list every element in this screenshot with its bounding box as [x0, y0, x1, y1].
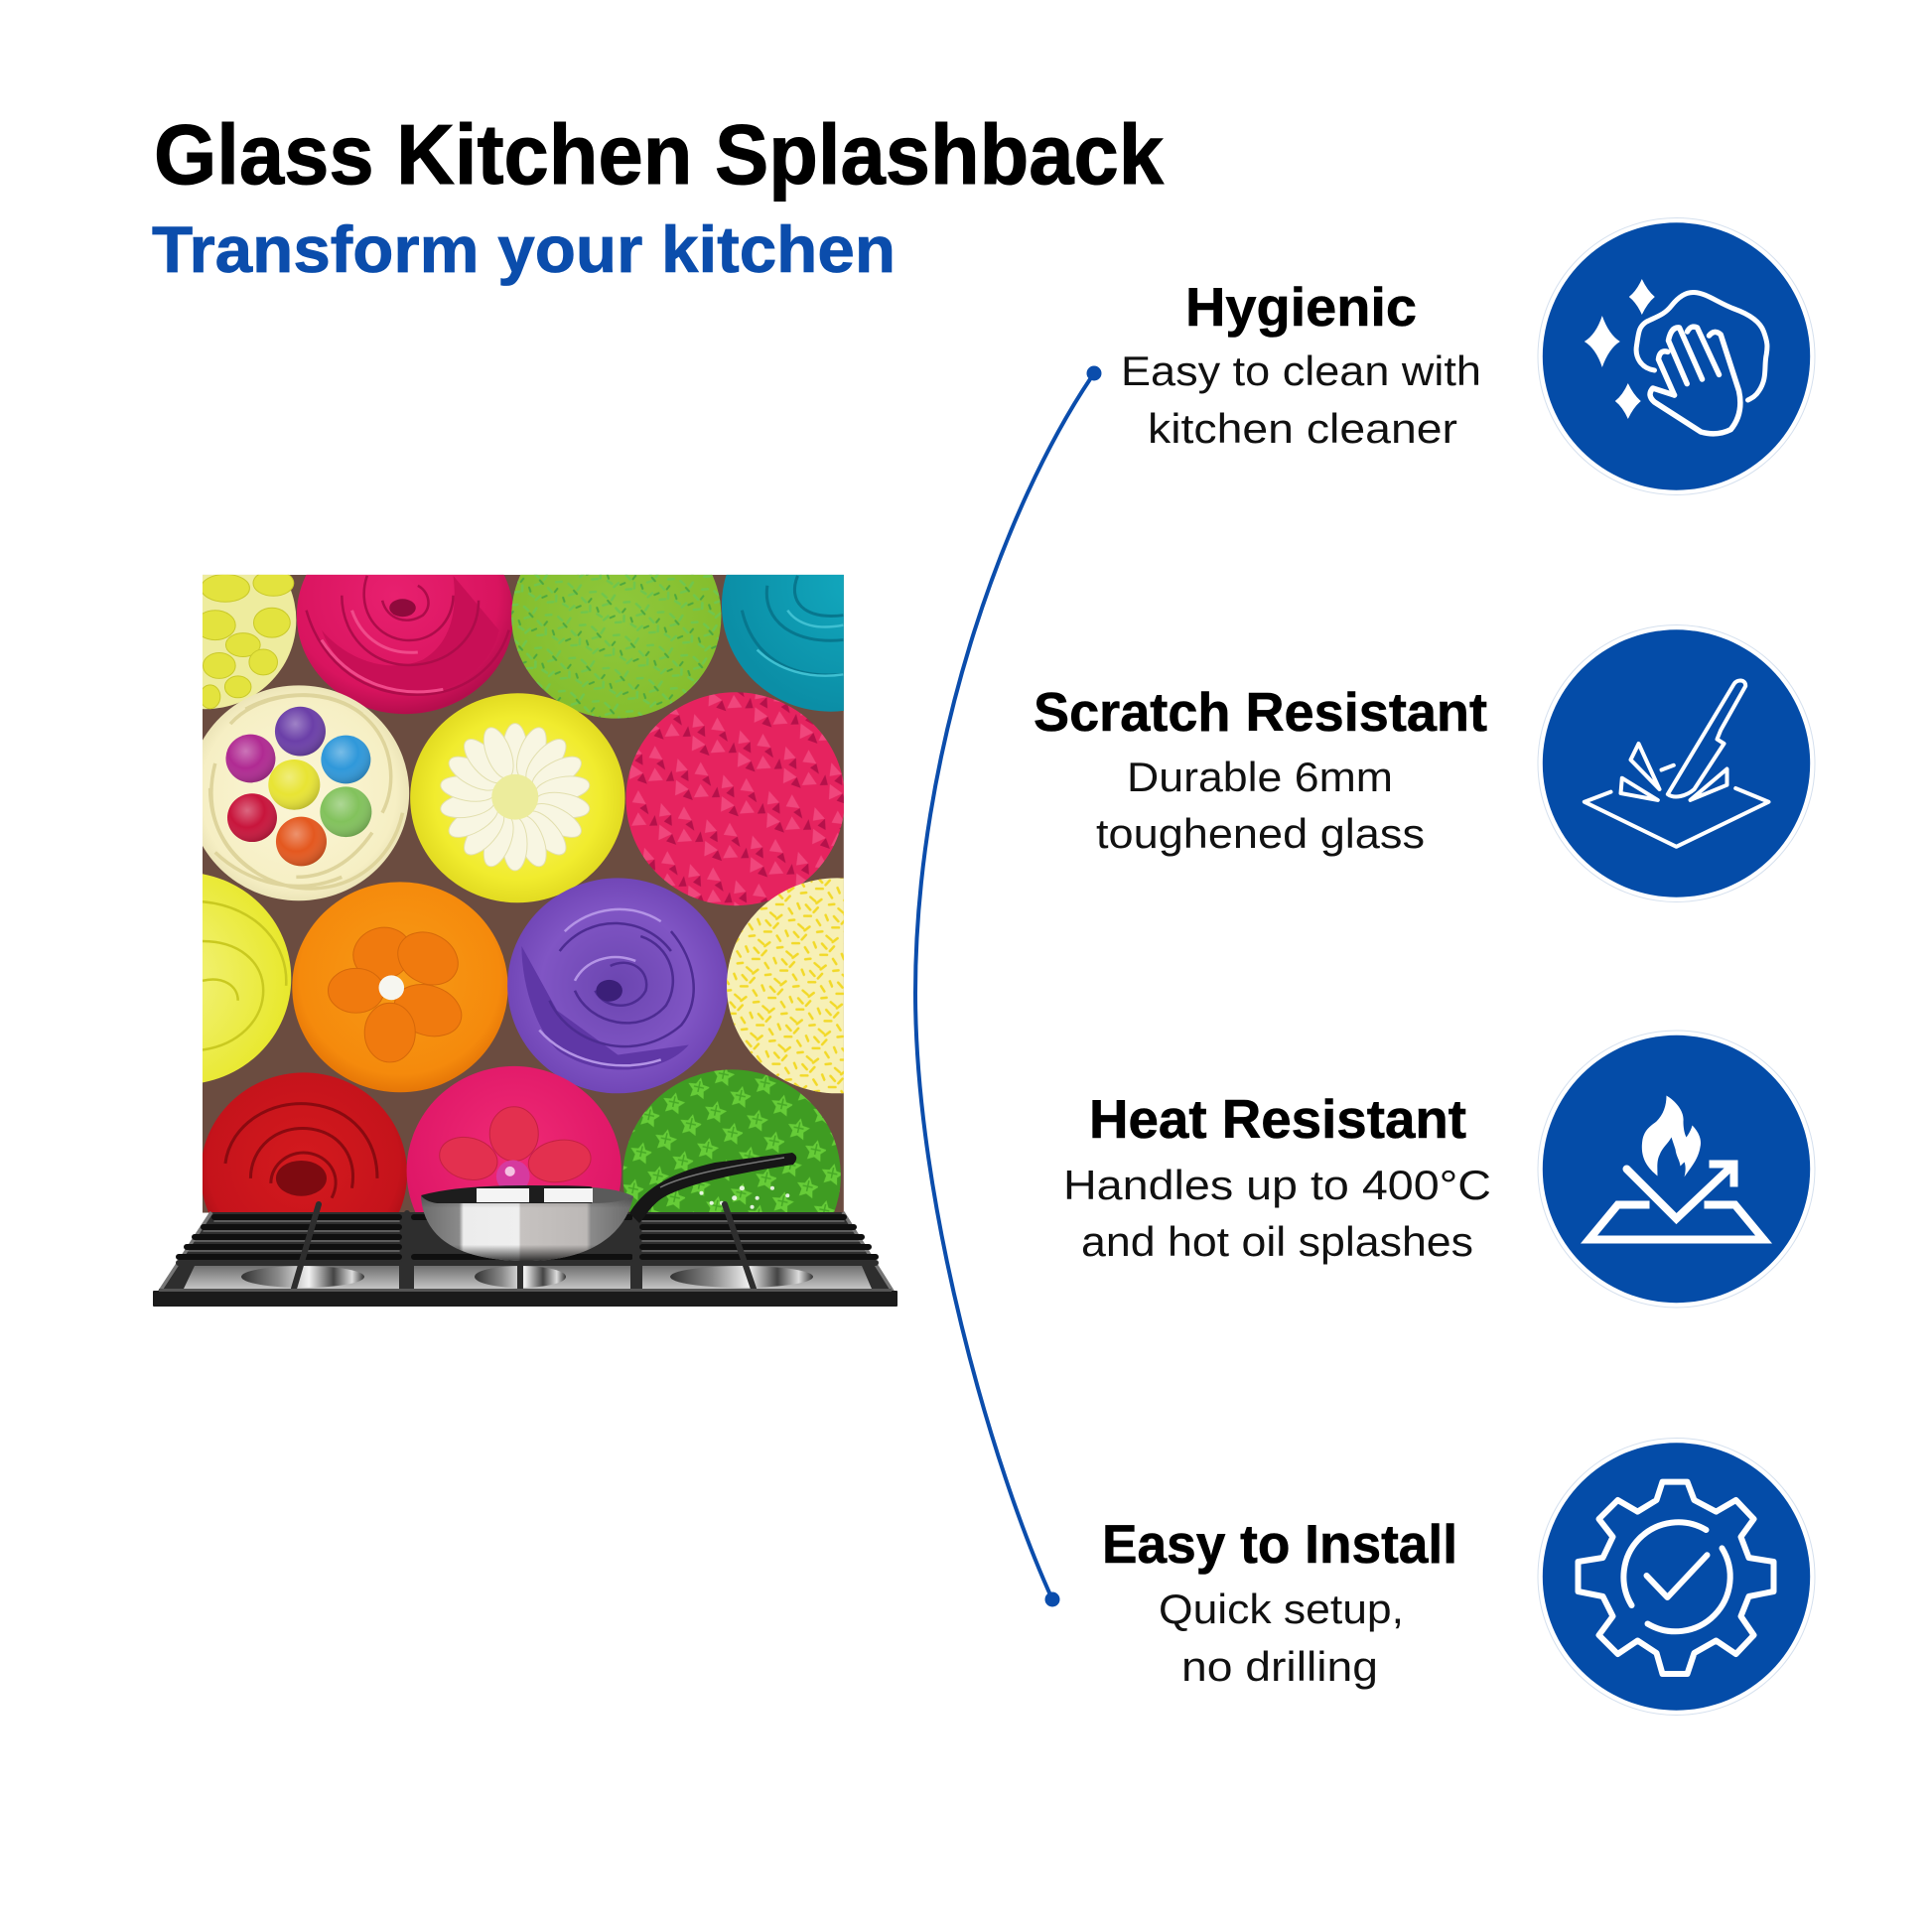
gas hob — [153, 1153, 897, 1307]
feature: hygienic — [1121, 276, 1481, 452]
cupcake: yellow with daisy — [410, 693, 624, 902]
connector dot bottom — [1044, 1592, 1060, 1606]
cupcake: hot pink with flower — [407, 1066, 621, 1212]
heading: Hygienic — [1185, 276, 1417, 338]
heading: Scratch Resistant — [1034, 681, 1487, 743]
cupcake: cream with candies — [189, 685, 409, 900]
description: Handles up to 400°C — [1063, 1162, 1491, 1208]
heading: Heat Resistant — [1089, 1088, 1466, 1150]
sugar flower — [329, 919, 469, 1062]
cupcake: green sprinkles — [511, 574, 721, 719]
cupcake: yellow buttons — [203, 574, 296, 709]
description: kitchen cleaner — [1148, 405, 1457, 452]
description — [1063, 1162, 1491, 1265]
cupcake: teal rose — [721, 574, 844, 712]
subtitle: Transform your kitchen — [152, 212, 896, 286]
burners — [241, 1266, 813, 1288]
cupcake: yellow swirl — [203, 874, 292, 1082]
cupcake: purple rose — [507, 878, 729, 1093]
icon: gear with check — [1538, 1438, 1815, 1716]
cupcake: yellow sprinkles — [727, 878, 844, 1094]
cupcake: orange with flower — [292, 882, 508, 1092]
pan body — [421, 1196, 633, 1261]
description: no drilling — [1181, 1643, 1378, 1690]
icon: hand wiping with sparkles — [1538, 218, 1815, 494]
title: Glass Kitchen Splashback — [154, 108, 1165, 203]
hob front edge — [153, 1291, 897, 1307]
splashback product photo: cupcakes — [203, 574, 844, 1213]
description: toughened glass — [1096, 810, 1425, 857]
feature: heat resistant — [1063, 1088, 1491, 1265]
description: and hot oil splashes — [1081, 1218, 1473, 1265]
hob top plate — [159, 1212, 894, 1293]
connector curve — [915, 365, 1102, 1606]
icon: knife on glass — [1538, 625, 1815, 901]
connector dot top — [1086, 365, 1102, 381]
frying pan — [421, 1153, 796, 1261]
pan handle — [629, 1153, 796, 1223]
description: Easy to clean with — [1121, 347, 1481, 394]
candies — [225, 707, 371, 866]
pan rim — [421, 1185, 592, 1203]
feature: easy to install — [1102, 1513, 1457, 1690]
grates — [179, 1204, 876, 1289]
cupcake: pink ruffles — [626, 692, 845, 905]
cupcake: red rose — [203, 1072, 407, 1213]
icon: flame on glass — [1538, 1031, 1815, 1308]
daisy — [439, 724, 592, 871]
burner wells — [184, 1266, 872, 1289]
heading: Easy to Install — [1102, 1513, 1457, 1575]
description: Quick setup, — [1159, 1586, 1404, 1632]
feature: scratch resistant — [1034, 681, 1487, 857]
description — [1159, 1586, 1404, 1690]
cupcake: green stars — [622, 1069, 841, 1212]
description — [1096, 754, 1425, 857]
description: Durable 6mm — [1127, 754, 1393, 800]
cupcake: pink rose — [296, 574, 512, 715]
description — [1121, 347, 1481, 452]
